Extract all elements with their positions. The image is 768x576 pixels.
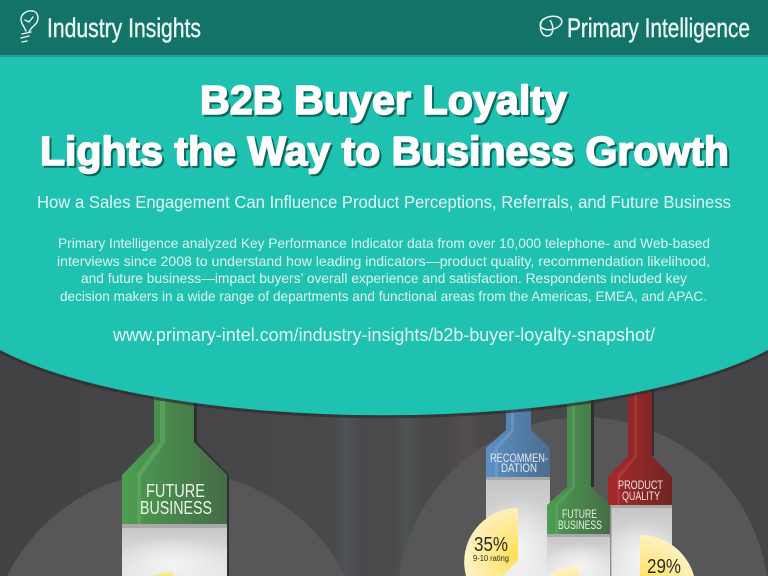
label: product quality: PRODUCT <box>618 480 663 492</box>
intro paragraph: decision makers in a wide range of departments and functional areas from the Americas, EMEA, and APAC. <box>60 288 707 304</box>
intro paragraph: Primary Intelligence analyzed Key Performance Indicator data from over 10,000 telephone- and Web-based <box>58 235 710 251</box>
title: B2B Buyer Loyalty <box>200 77 567 123</box>
header bar <box>0 0 768 57</box>
title: Lights the Way to Business Growth <box>40 128 729 174</box>
label: recommendation: RECOMMEN- <box>490 453 548 465</box>
label: future business right <box>558 509 602 532</box>
icon: light bulb <box>21 11 38 42</box>
stat: 35%: 9-10 rating <box>473 554 509 563</box>
pie: future business right <box>548 566 579 576</box>
title <box>40 77 731 176</box>
label: product quality: QUALITY <box>622 491 660 503</box>
label: future business: BUSINESS <box>140 498 212 518</box>
title: Lights the Way to Business Growth <box>42 130 731 176</box>
label: future business: FUTURE <box>146 481 205 501</box>
title: B2B Buyer Loyalty <box>202 79 569 125</box>
intro paragraph: interviews since 2008 to understand how leading indicators—product quality, recommendation likelihood, <box>57 253 710 269</box>
stat: 35%: 35% <box>474 534 508 556</box>
label: future business right: BUSINESS <box>558 520 602 532</box>
brand: industry insights: Industry Insights <box>47 13 201 43</box>
label: recommendation <box>490 453 548 475</box>
label: product quality <box>618 480 663 503</box>
label: future business right: FUTURE <box>562 509 597 521</box>
source url: www.primary-intel.com/industry-insights/b2b-buyer-loyalty-snapshot/ <box>112 325 655 345</box>
bottle: future business (right) <box>547 395 611 576</box>
subtitle: How a Sales Engagement Can Influence Product Perceptions, Referrals, and Future Business <box>37 192 731 212</box>
intro paragraph <box>57 235 710 304</box>
stat: 35% <box>473 534 509 563</box>
intro paragraph: and future business—impact buyers’ overall experience and satisfaction. Respondents included key <box>81 270 687 286</box>
pie: product quality 29% <box>640 535 694 576</box>
bottle: recommendation <box>464 395 550 576</box>
bottle: future business (left, large) <box>122 395 229 576</box>
teal panel shadow <box>0 300 768 418</box>
teal intro panel <box>0 50 768 415</box>
background light beams <box>333 400 484 576</box>
icon: primary intelligence logo <box>539 14 563 36</box>
label: recommendation: DATION <box>501 463 537 475</box>
pie: future business left <box>151 572 173 576</box>
bottle: product quality <box>608 385 694 576</box>
label: future business <box>140 481 212 518</box>
pie: recommendation 35% <box>464 508 518 576</box>
right spotlight circle <box>399 417 767 576</box>
left spotlight circle <box>7 472 345 576</box>
